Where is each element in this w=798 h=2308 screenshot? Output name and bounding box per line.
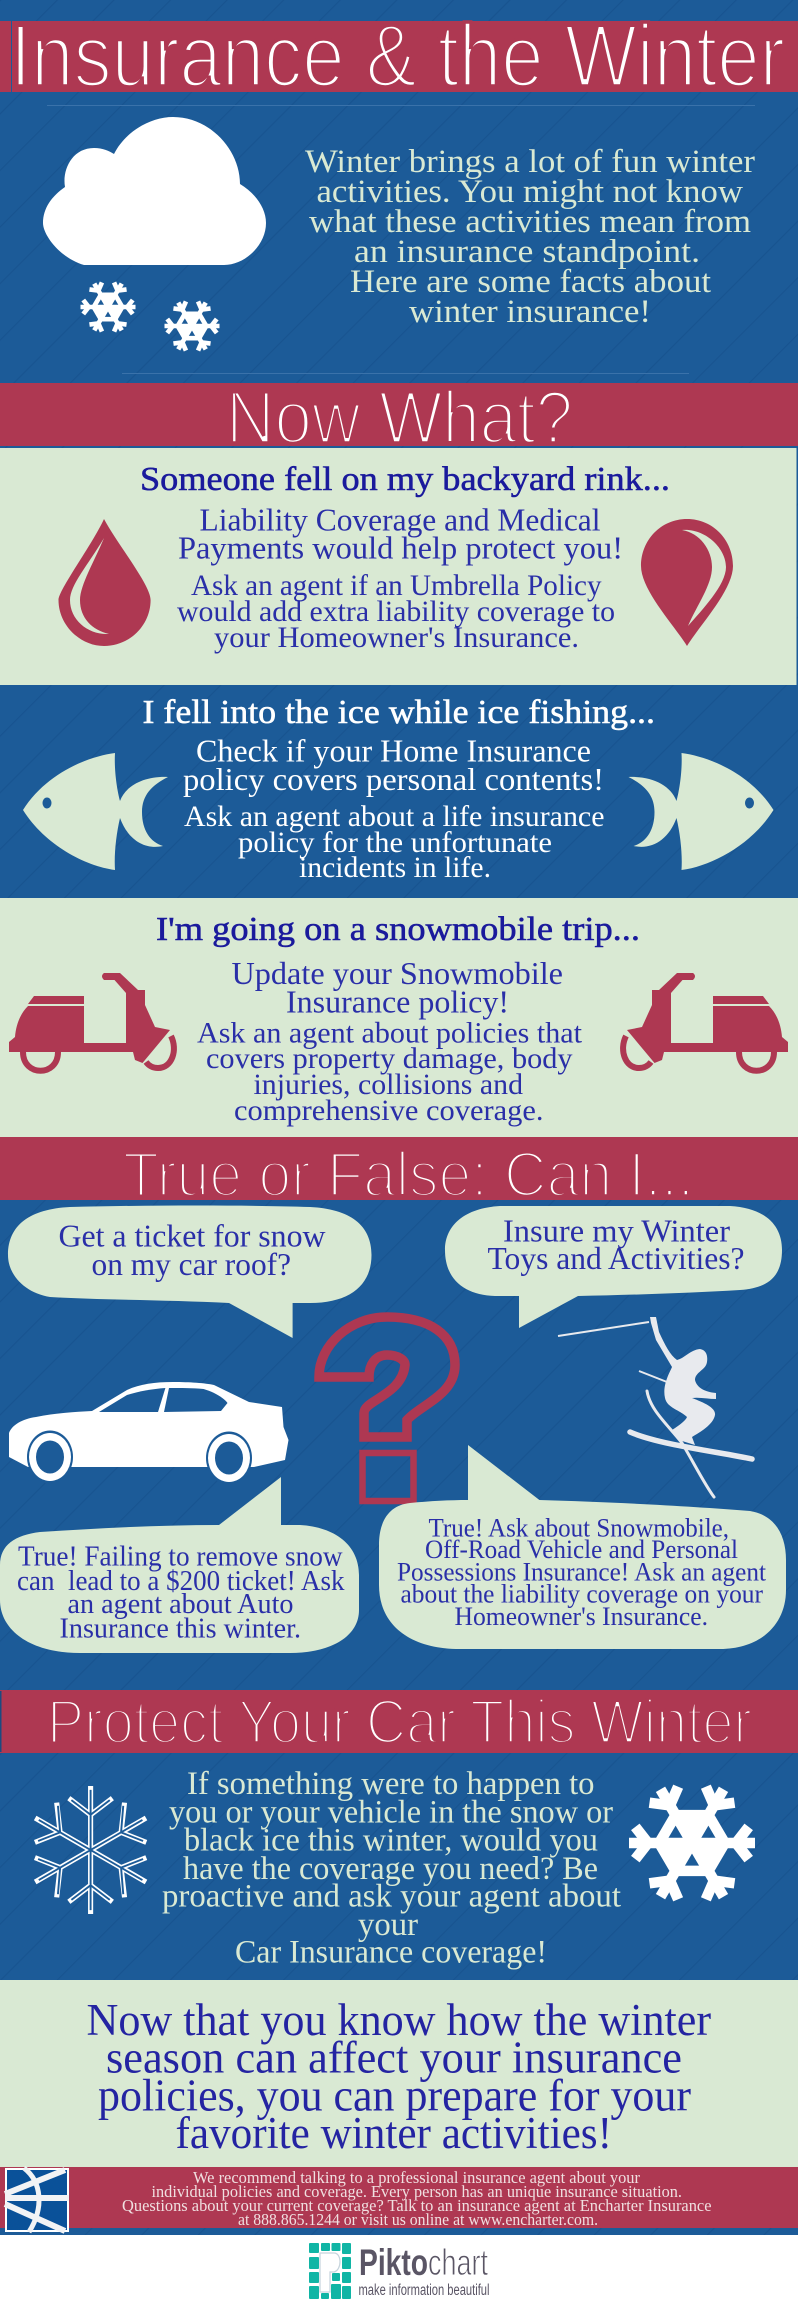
heading: snowmobile: I'm going on a snowmobile trip... xyxy=(156,911,640,948)
text: rink advice: Liability Coverage and Medical xyxy=(200,502,601,538)
panel: snowmobile xyxy=(0,898,798,1137)
speech bubble: toys answer: Possessions Insurance! Ask an agent xyxy=(397,1558,767,1586)
heading band: Now What?: Now What? xyxy=(226,376,573,459)
speech bubble: ticket question xyxy=(8,1206,372,1338)
text: snowmobile advice: Ask an agent about policies that xyxy=(197,1016,583,1050)
text: ice fishing advice: policy for the unfortunate xyxy=(238,826,552,859)
panel: footer disclaimer xyxy=(0,2167,798,2229)
panel: footer disclaimer: Questions about your current coverage? Talk to an insurance agent at Encharter Insurance xyxy=(122,2196,712,2215)
text: protect your car xyxy=(162,1766,621,1970)
icon: snowmobile right xyxy=(623,973,788,1071)
intro text: activities. You might not know xyxy=(316,174,743,210)
intro text: an insurance standpoint. xyxy=(354,234,700,270)
text: snowmobile advice: Update your Snowmobile xyxy=(232,955,563,991)
icon: outline snowflake xyxy=(35,1786,146,1914)
panel: footer disclaimer: We recommend talking to a professional insurance agent about your xyxy=(193,2168,640,2187)
speech bubble: toys answer: Off-Road Vehicle and Personal xyxy=(425,1535,738,1564)
text: protect your car: have the coverage you need? Be xyxy=(183,1851,598,1887)
text: snowmobile advice xyxy=(197,955,583,1127)
text: protect your car: proactive and ask your agent about xyxy=(162,1878,621,1914)
text: protect your car: you or your vehicle in the snow or xyxy=(169,1794,613,1830)
text: snowmobile advice: Insurance policy! xyxy=(286,984,509,1020)
intro text: Winter brings a lot of fun winter xyxy=(305,144,755,180)
speech bubble: ticket answer: Insurance this winter. xyxy=(60,1614,301,1644)
speech bubble: ticket answer: True! Failing to remove snow xyxy=(18,1542,343,1572)
icon: fish right xyxy=(628,753,774,870)
text: snowmobile advice: injuries, collisions and xyxy=(254,1068,523,1101)
panel: conclusion: favorite winter activities! xyxy=(176,2108,612,2158)
speech bubble: toys question xyxy=(445,1206,782,1328)
speech bubble: toys answer xyxy=(379,1445,786,1649)
intro text: what these activities mean from xyxy=(309,204,751,240)
icon: filled snowflake xyxy=(629,1787,755,1899)
speech bubble: toys answer: Homeowner's Insurance. xyxy=(454,1602,708,1631)
text: ice fishing advice: policy covers personal contents! xyxy=(183,761,604,797)
speech bubble: toys answer: True! Ask about Snowmobile, xyxy=(428,1514,729,1542)
text: ice fishing advice: Check if your Home Insurance xyxy=(196,732,591,768)
text: snowmobile advice: comprehensive coverage. xyxy=(234,1094,544,1127)
intro text: winter insurance! xyxy=(409,294,651,330)
icon: Piktochart mark xyxy=(309,2243,351,2299)
title band xyxy=(0,6,798,105)
icon: car xyxy=(9,1382,288,1484)
speech bubble: ticket question: on my car roof? xyxy=(92,1246,291,1282)
text: rink advice: would add extra liability coverage to xyxy=(177,595,615,628)
speech bubble: toys question: Insure my Winter xyxy=(503,1212,730,1248)
speech bubble: ticket answer xyxy=(0,1477,359,1653)
panel: conclusion xyxy=(0,1980,798,2167)
logo wordmark: Pikto xyxy=(359,2242,428,2283)
panel: conclusion: Now that you know how the winter xyxy=(86,1995,711,2045)
speech bubble: ticket answer: an agent about Auto xyxy=(68,1589,294,1620)
icon: water drop xyxy=(58,519,151,646)
panel: footer disclaimer: individual policies and coverage. Every person has an unique insurance situation. xyxy=(152,2182,682,2201)
text: ice fishing advice xyxy=(183,732,604,884)
speech bubble: ticket answer: can lead to a $200 ticket! Ask xyxy=(17,1566,345,1597)
icon: company logo xyxy=(5,2168,69,2232)
icon: cloud with snowflakes xyxy=(43,117,266,351)
text: ice fishing advice: incidents in life. xyxy=(299,851,491,884)
panel: backyard rink xyxy=(0,448,796,685)
heading: rink: Someone fell on my backyard rink... xyxy=(140,461,670,498)
text: snowmobile advice: covers property damage, body xyxy=(206,1042,572,1075)
logo wordmark xyxy=(358,2242,490,2299)
panel: conclusion: season can affect your insurance xyxy=(106,2032,682,2082)
intro text: Here are some facts about xyxy=(350,264,711,300)
intro text xyxy=(305,144,755,330)
logo wordmark: make information beautiful xyxy=(358,2282,490,2299)
text: rink advice: Payments would help protect you! xyxy=(178,530,623,566)
icon: skier xyxy=(558,1317,752,1497)
white footer with Piktochart logo xyxy=(0,2235,798,2308)
icon: map pin drop xyxy=(641,519,733,646)
panel: footer disclaimer: at 888.865.1244 or visit us online at www.encharter.com. xyxy=(238,2210,598,2229)
heading band: True or False: True or False: Can I... xyxy=(123,1140,694,1210)
speech bubble: toys answer: about the liability coverage on your xyxy=(400,1580,763,1608)
heading band: Now What? xyxy=(0,376,798,459)
speech bubble: toys question: Toys and Activities? xyxy=(488,1240,744,1276)
text: rink advice xyxy=(177,502,623,654)
logo wordmark: chart xyxy=(428,2242,489,2283)
panel: ice fishing xyxy=(23,694,774,884)
icon: fish left xyxy=(23,753,168,870)
icon: small snowflake right xyxy=(164,301,220,351)
text: protect your car: your xyxy=(358,1907,418,1943)
icon: small snowflake left xyxy=(80,282,136,332)
text: protect your car: Car Insurance coverage! xyxy=(235,1934,547,1970)
text: rink advice: your Homeowner's Insurance. xyxy=(214,621,579,654)
text: protect your car: If something were to happen to xyxy=(187,1766,594,1802)
text: ice fishing advice: Ask an agent about a life insurance xyxy=(184,800,604,833)
speech bubble: ticket question: Get a ticket for snow xyxy=(58,1218,326,1254)
text: rink advice: Ask an agent if an Umbrella Policy xyxy=(191,569,602,602)
icon: snowmobile left xyxy=(9,973,174,1071)
panel: conclusion: policies, you can prepare for your xyxy=(98,2070,691,2120)
icon: question mark xyxy=(319,1317,455,1501)
heading: ice fishing: I fell into the ice while ice fishing... xyxy=(142,694,655,731)
text: protect your car: black ice this winter, would you xyxy=(184,1822,598,1858)
